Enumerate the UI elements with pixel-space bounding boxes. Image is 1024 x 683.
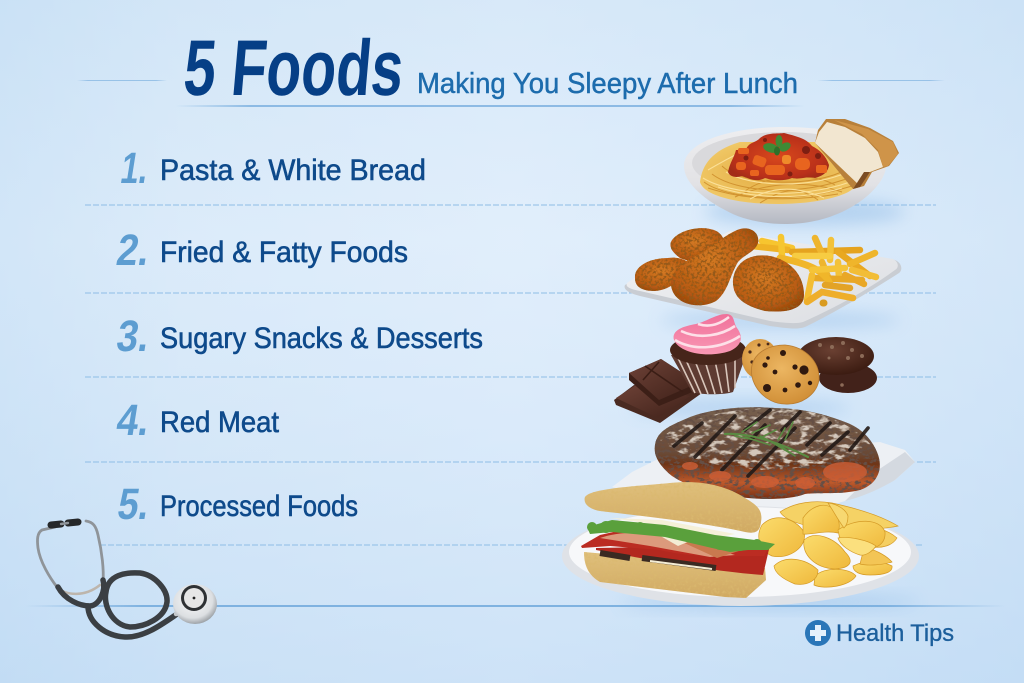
chocolate bars — [614, 359, 702, 423]
food: sandwich and chips on plate — [562, 482, 920, 609]
light char highlights — [660, 408, 872, 470]
parsley — [762, 135, 792, 156]
cupcake — [670, 314, 746, 394]
number 4: 4. — [113, 396, 153, 445]
sandwich top bread — [585, 482, 761, 533]
food: pasta bowl and bread — [684, 119, 905, 226]
icon: medical cross — [805, 620, 831, 646]
number 2: 2. — [113, 226, 153, 275]
grill marks — [674, 410, 868, 476]
bread slice — [815, 119, 899, 189]
list item 2 — [113, 226, 408, 275]
tomato sauce — [728, 133, 829, 180]
cookies — [742, 337, 877, 404]
food: fried chicken and fries — [625, 228, 901, 329]
fries — [752, 237, 876, 303]
title subtitle: Making You Sleepy After Lunch — [417, 68, 798, 100]
chicken pieces — [635, 228, 804, 312]
stethoscope — [37, 521, 217, 637]
chips — [759, 502, 898, 587]
chest piece — [173, 584, 217, 624]
spaghetti — [700, 142, 857, 204]
list item 1 — [117, 144, 426, 193]
list item 5 — [114, 480, 358, 529]
bowl — [684, 127, 886, 224]
lettuce — [587, 518, 775, 552]
label sugary snacks and desserts: Sugary Snacks & Desserts — [160, 322, 483, 355]
label pasta and white bread: Pasta & White Bread — [160, 154, 426, 187]
label red meat: Red Meat — [160, 406, 280, 439]
health tips badge — [805, 620, 954, 647]
plate — [625, 231, 901, 329]
food: steak on plate — [612, 407, 915, 510]
number 1: 1. — [117, 144, 152, 193]
rosemary — [725, 422, 808, 457]
rubber tubing — [58, 580, 104, 606]
divider lines — [25, 80, 1005, 607]
label fried and fatty foods: Fried & Fatty Foods — [160, 236, 408, 269]
ear pieces — [51, 522, 78, 525]
ear tubes — [37, 527, 57, 587]
label processed foods: Processed Foods — [160, 490, 358, 523]
list item 4 — [113, 396, 280, 445]
food: sweets — [614, 314, 877, 423]
list item 3 — [113, 312, 483, 361]
number 3: 3. — [113, 312, 153, 361]
seared side colouring — [682, 462, 867, 489]
plate — [612, 442, 915, 510]
sandwich bottom bread — [584, 552, 766, 598]
steak — [655, 407, 880, 499]
title main: 5 Foods: 5 Foods — [181, 23, 407, 112]
plate — [562, 506, 919, 606]
sandwich fillings — [581, 526, 770, 575]
title — [181, 23, 798, 112]
health tips label: Health Tips — [836, 620, 954, 647]
number 5: 5. — [114, 480, 153, 529]
